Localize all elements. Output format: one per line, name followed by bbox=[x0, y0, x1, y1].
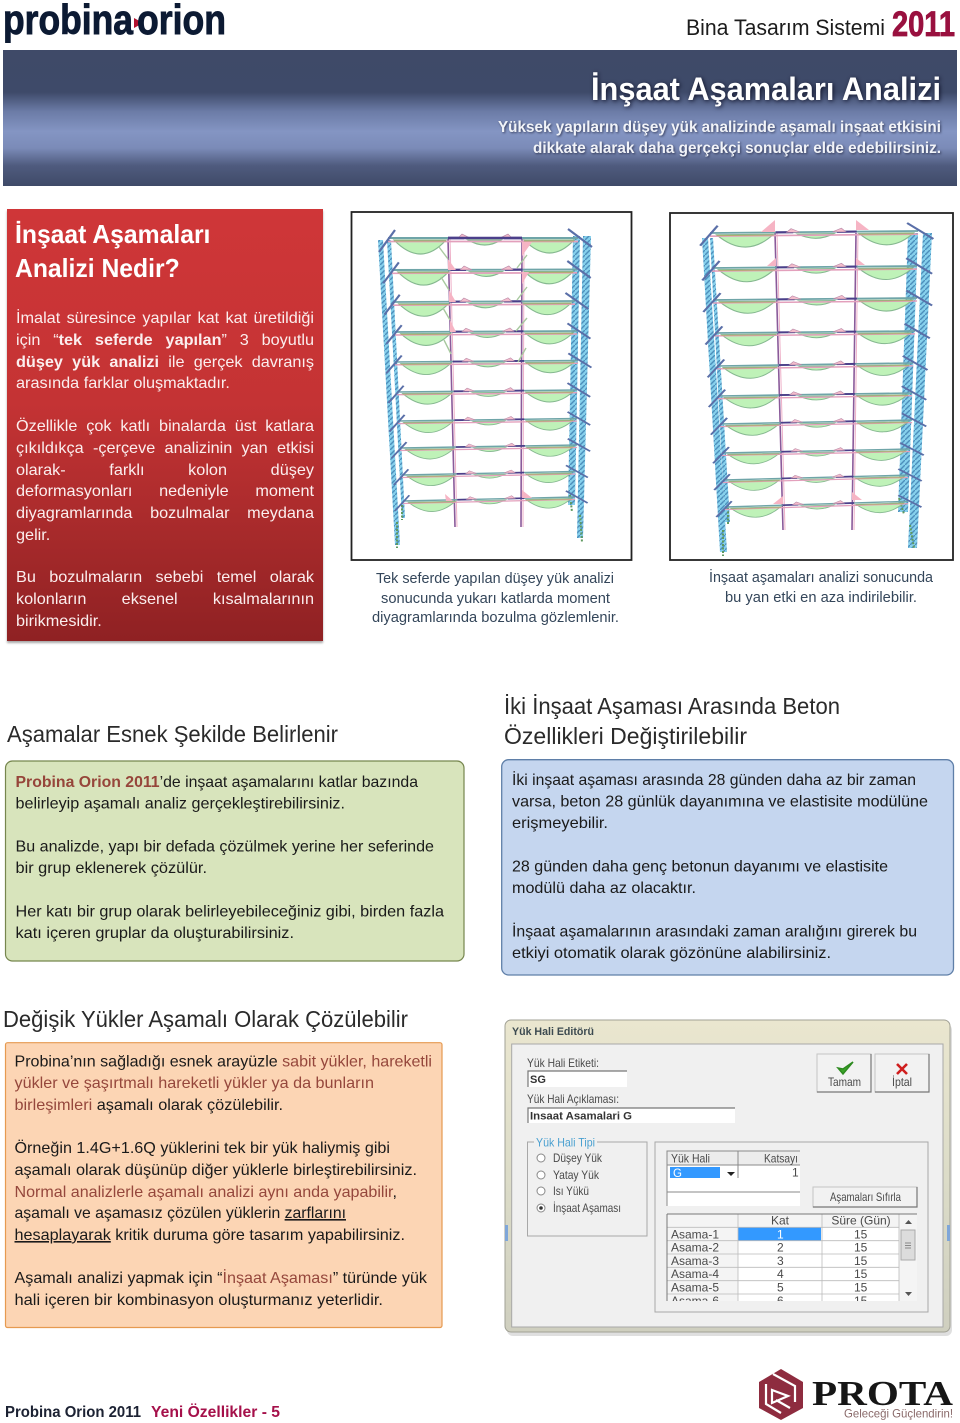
caption: construction stage frame bbox=[709, 568, 934, 606]
stage grid: 15 bbox=[854, 1267, 868, 1281]
panel: green stages: Bu analizde, yapı bir defada çözülmek yerine her seferinde bbox=[16, 839, 434, 856]
load combination grid: 1 bbox=[792, 1166, 799, 1180]
logo: probina orion bbox=[3, 0, 226, 43]
stage grid bbox=[664, 1214, 924, 1312]
panel: green stages: Her katı bir grup olarak belirleyebileceğiniz gibi, birden fazla bbox=[16, 904, 444, 921]
panel: orange loads: Normal analizlerle aşamalı analizi aynı anda yapabilir, bbox=[14, 1184, 397, 1201]
button: Aşamaları Sıfırla: Aşamaları Sıfırla bbox=[830, 1190, 901, 1204]
stage grid: Süre (Gün) bbox=[831, 1214, 891, 1228]
panel: orange loads: hali içeren bir kombinasyon oluşturmanız yeterlidir. bbox=[14, 1292, 383, 1309]
load combination grid: Katsayı bbox=[764, 1152, 798, 1166]
paragraph: fabrication sequence: İmalat süresince yapılar kat kat üretildiği bbox=[16, 310, 313, 327]
footer: document label bbox=[5, 1402, 280, 1421]
stage grid: 15 bbox=[854, 1240, 868, 1254]
stage grid: Asama-1 bbox=[671, 1228, 719, 1242]
product title: Bina Tasarım Sistemi 2011 bbox=[686, 5, 955, 44]
load case description field bbox=[527, 1092, 735, 1123]
panel: blue concrete properties: modülü daha az olacaktır. bbox=[512, 880, 696, 897]
paragraph: fabrication sequence: arasında farklar oluşmaktadır. bbox=[16, 375, 229, 392]
banner title: İnşaat Aşamaları Analizi bbox=[591, 71, 941, 107]
caption: single-stage frame: Tek seferde yapılan düşey yük analizi bbox=[376, 570, 614, 587]
panel: blue concrete properties: etkiyi otomatik olarak gözönüne alabilirsiniz. bbox=[512, 945, 831, 962]
paragraph: tall buildings: deformasyonları nedeniyle moment bbox=[16, 483, 313, 500]
caption: single-stage frame bbox=[372, 570, 619, 626]
paragraph: fabrication sequence bbox=[16, 309, 314, 392]
paragraph: axial shortening: birikmesidir. bbox=[16, 613, 101, 630]
button: Tamam bbox=[817, 1054, 871, 1092]
panel heading: İnşaat Aşamaları bbox=[15, 219, 210, 249]
paragraph: tall buildings: Özellikle çok katlı binalarda üst katlara bbox=[16, 418, 313, 435]
banner subtitle: Yüksek yapıların düşey yük analizinde aşamalı inşaat etkisini bbox=[498, 119, 941, 136]
panel: blue concrete properties: varsa, beton 28 günlük dayanımına ve elastisite modülüne bbox=[512, 794, 928, 811]
stage grid: Asama-2 bbox=[671, 1240, 719, 1254]
heading: concrete properties: Özellikleri Değiştirilebilir bbox=[504, 723, 747, 749]
stage grid: 15 bbox=[854, 1294, 868, 1308]
panel: green stages: belirleyip aşamalı analiz gerçekleştirebilirsiniz. bbox=[16, 796, 345, 812]
group: load case type bbox=[528, 1136, 647, 1236]
panel: orange loads: hesaplayarak kritik duruma göre tasarım yapabilirsiniz. bbox=[14, 1227, 405, 1244]
button: Tamam: Tamam bbox=[828, 1075, 861, 1089]
paragraph: axial shortening bbox=[16, 569, 314, 630]
panel: blue concrete properties: İki inşaat aşaması arasında 28 günden daha az bir zaman bbox=[512, 770, 916, 789]
heading: various loads: Değişik Yükler Aşamalı Olarak Çözülebilir bbox=[3, 1006, 408, 1032]
heading: concrete properties bbox=[504, 693, 840, 749]
panel: orange loads: Örneğin 1.4G+1.6Q yüklerini tek bir yük haliymiş gibi bbox=[14, 1139, 390, 1157]
logo: PROTA bbox=[759, 1369, 954, 1420]
heading: concrete properties: İki İnşaat Aşaması Arasında Beton bbox=[504, 693, 840, 719]
stage grid: 3 bbox=[777, 1254, 784, 1268]
caption: single-stage frame: sonucunda yukarı katlarda moment bbox=[381, 590, 611, 607]
stage grid: 15 bbox=[854, 1280, 868, 1294]
logo: PROTA: PROTA bbox=[812, 1374, 954, 1413]
load case description field: Insaat Asamalari G bbox=[530, 1110, 632, 1122]
load case label field bbox=[527, 1056, 627, 1087]
stage grid: Kat bbox=[771, 1214, 790, 1228]
group: load case type: Düşey Yük bbox=[553, 1151, 603, 1165]
stage grid: 5 bbox=[777, 1280, 784, 1294]
stage grid: Asama-3 bbox=[671, 1254, 719, 1268]
load combination grid: Yük Hali bbox=[671, 1152, 710, 1166]
paragraph: axial shortening: kolonların eksenel kısalmalarının bbox=[16, 591, 313, 608]
panel: blue concrete properties: erişmeyebilir. bbox=[512, 815, 608, 832]
stage grid: 15 bbox=[854, 1228, 868, 1242]
group: load case type: Yük Hali Tipi bbox=[536, 1136, 595, 1150]
banner subtitle: dikkate alarak daha gerçekçi sonuçlar elde edebilirsiniz. bbox=[533, 140, 941, 157]
stage grid: 6 bbox=[777, 1294, 784, 1308]
stage grid: Asama-5 bbox=[671, 1280, 719, 1294]
stage grid: 2 bbox=[777, 1240, 784, 1254]
panel: what is construction stage analysis bbox=[7, 209, 323, 641]
caption: single-stage frame: diyagramlarında bozulma gözlemlenir. bbox=[372, 609, 619, 626]
frame diagram: construction stage analysis bbox=[670, 213, 953, 560]
panel: green stages: bir grup eklenerek çözülür. bbox=[16, 860, 207, 877]
panel: blue concrete properties bbox=[502, 760, 954, 975]
frame diagram: single-stage analysis bbox=[352, 212, 632, 560]
panel heading bbox=[15, 219, 210, 283]
button: Aşamaları Sıfırla bbox=[813, 1187, 917, 1207]
panel: orange loads: aşamalı olarak düşünüp diğer yüklerle birleştirebilirsiniz. bbox=[14, 1162, 417, 1179]
load combination grid: G bbox=[673, 1168, 682, 1180]
caption: construction stage frame: İnşaat aşamaları analizi sonucunda bbox=[709, 568, 934, 586]
stage grid: 15 bbox=[854, 1254, 868, 1268]
paragraph: tall buildings bbox=[16, 418, 314, 544]
group: construction stage tables bbox=[655, 1142, 928, 1312]
paragraph: tall buildings: çıkıldıkça -çerçeve analizinin yan etkisi bbox=[16, 440, 313, 457]
footer: document label: Probina Orion 2011 bbox=[5, 1404, 141, 1421]
product title: Bina Tasarım Sistemi 2011: Bina Tasarım Sistemi bbox=[686, 15, 885, 40]
panel: orange loads bbox=[6, 1043, 442, 1328]
load case label field: Yük Hali Etiketi: bbox=[527, 1056, 599, 1070]
group: load case type: Yatay Yük bbox=[553, 1168, 600, 1182]
dialog screenshot: load case editor bbox=[505, 1020, 952, 1336]
paragraph: axial shortening: Bu bozulmaların sebebi temel olarak bbox=[16, 569, 313, 586]
panel: orange loads: Aşamalı analizi yapmak için “İnşaat Aşaması” türünde yük bbox=[14, 1268, 428, 1287]
panel: blue concrete properties: 28 günden daha genç betonun dayanımı ve elastisite bbox=[512, 859, 888, 876]
panel: orange loads: aşamalı ve aşamasız çözülen yüklerin zarflarını bbox=[14, 1205, 346, 1222]
banner subtitle bbox=[498, 119, 941, 157]
button: İptal bbox=[875, 1054, 929, 1092]
load case label field: SG bbox=[530, 1074, 546, 1086]
paragraph: fabrication sequence: için “tek seferde yapılan” 3 boyutlu bbox=[16, 332, 313, 349]
paragraph: tall buildings: diyagramlarında bozulmalar meydana bbox=[16, 505, 313, 522]
button: İptal: İptal bbox=[892, 1075, 912, 1089]
logo: PROTA: Geleceği Güçlendirin! bbox=[844, 1406, 953, 1420]
panel: orange loads: birleşimleri aşamalı olarak çözülebilir. bbox=[14, 1097, 283, 1114]
panel heading: Analizi Nedir? bbox=[15, 253, 180, 283]
stage grid: Asama-6 bbox=[671, 1294, 719, 1308]
load combination grid bbox=[667, 1151, 800, 1206]
panel: green stages: Probina Orion 2011’de inşaat aşamalarını katlar bazında bbox=[16, 774, 418, 791]
group: load case type: Isı Yükü bbox=[553, 1184, 589, 1198]
paragraph: fabrication sequence: düşey yük analizi ile gerçek davranış bbox=[16, 354, 313, 371]
stage grid: Asama-4 bbox=[671, 1267, 719, 1281]
dialog title: Yük Hali Editörü bbox=[512, 1026, 594, 1038]
panel: green stages bbox=[6, 761, 464, 961]
panel: orange loads: yükler ve şaşırtmalı hareketli yükler ya da bunların bbox=[14, 1075, 374, 1092]
load case description field: Yük Hali Açıklaması: bbox=[527, 1092, 619, 1106]
heading: stages defined flexibly: Aşamalar Esnek Şekilde Belirlenir bbox=[7, 721, 338, 747]
paragraph: tall buildings: gelir. bbox=[16, 527, 50, 544]
panel: orange loads: Probina’nın sağladığı esnek arayüzle sabit yükler, hareketli bbox=[14, 1054, 432, 1071]
panel: green stages: katı içeren gruplar da oluşturabilirsiniz. bbox=[16, 925, 294, 942]
paragraph: tall buildings: olarak- farklı kolon düşey bbox=[16, 462, 313, 479]
stage grid: 1 bbox=[777, 1228, 784, 1242]
group: load case type: İnşaat Aşaması bbox=[553, 1201, 621, 1215]
caption: construction stage frame: bu yan etki en aza indirilebilir. bbox=[725, 589, 917, 606]
stage grid: 4 bbox=[777, 1267, 784, 1281]
icon: PROTA hexagon bbox=[759, 1369, 803, 1420]
header banner bbox=[3, 50, 957, 186]
footer: document label: Yeni Özellikler - 5 bbox=[151, 1402, 280, 1421]
panel: blue concrete properties: İnşaat aşamalarının arasındaki zaman aralığını girerek bu bbox=[512, 922, 917, 941]
